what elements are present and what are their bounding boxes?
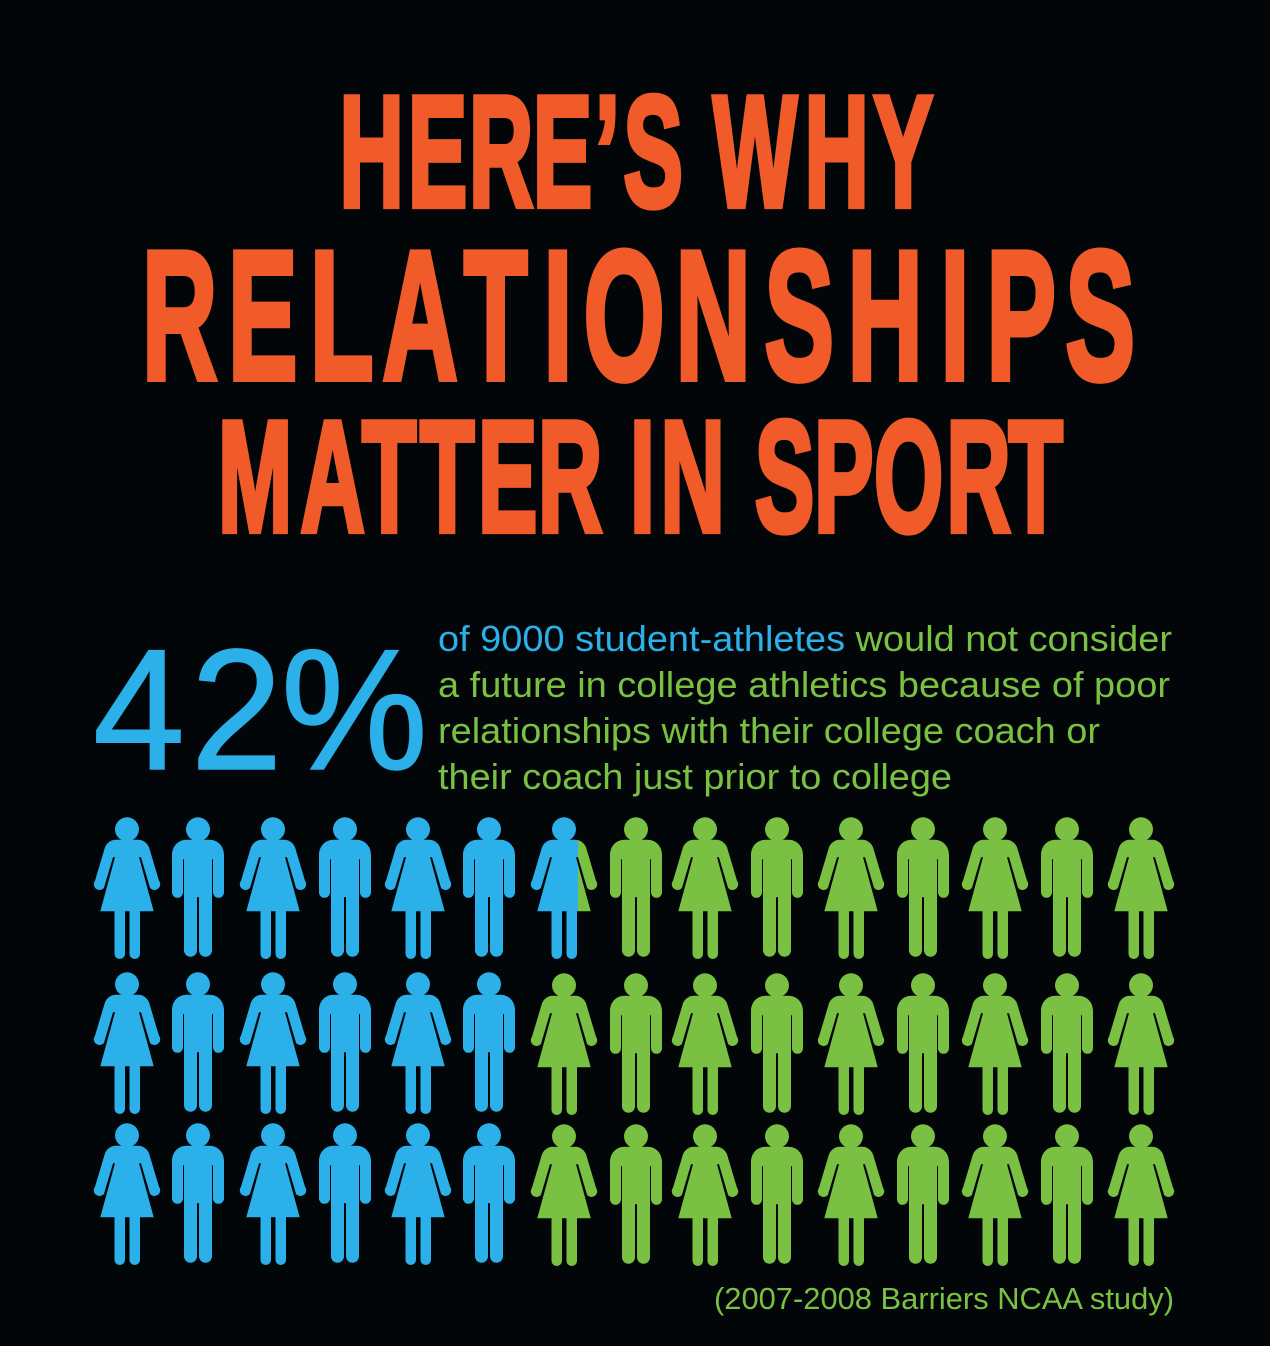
- description line 2: a future in college athletics because of poor: [438, 664, 1170, 705]
- blue figures row 2: [94, 972, 515, 1114]
- statistic: 42%: 42%: [93, 613, 428, 806]
- green figures row 1: [610, 817, 1174, 959]
- pictogram row 1: [94, 817, 1174, 959]
- description line 4: their coach just prior to college: [438, 756, 952, 797]
- pictogram row 2: [94, 972, 1174, 1115]
- description line 3: relationships with their college coach or: [438, 710, 1100, 751]
- green figures row 2: [531, 973, 1174, 1115]
- blue figures row 3: [94, 1123, 515, 1265]
- pictogram row 3: [94, 1123, 1174, 1266]
- title line 2: RELATIONSHIPS: [142, 213, 1135, 418]
- title: [142, 64, 1135, 566]
- description line 1: of 9000 student-athletes would not consider: [438, 618, 1172, 659]
- blue figures row 1: [94, 817, 515, 959]
- description text: [438, 618, 1172, 797]
- title line 3: MATTER IN SPORT: [218, 389, 1063, 566]
- infographic canvas: [94, 92, 1174, 1316]
- split figure: part blue, part green: [531, 817, 597, 959]
- title line 1: HERE’S WHY: [339, 64, 933, 241]
- source note: (2007-2008 Barriers NCAA study): [714, 1281, 1174, 1316]
- green figures row 3: [531, 1124, 1174, 1266]
